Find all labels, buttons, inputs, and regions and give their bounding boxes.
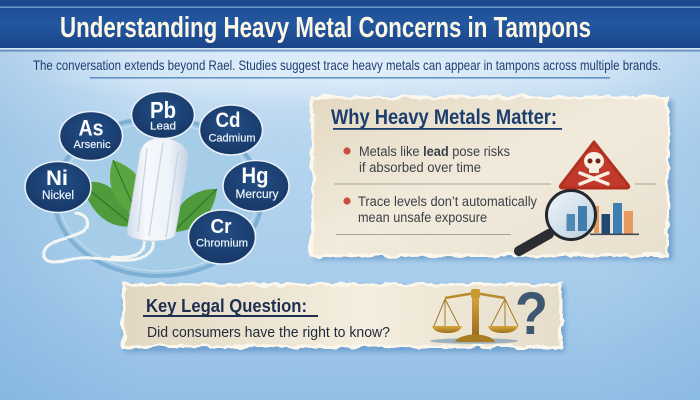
- paper card: [122, 283, 565, 352]
- icon: skull warning triangle: [560, 142, 629, 188]
- heading: Key Legal Question:: [146, 296, 307, 316]
- badge: chromium: Cr: [210, 216, 232, 238]
- bullet: lead risk: [343, 144, 510, 175]
- badge: arsenic: As: [78, 116, 104, 140]
- panel: key legal question: [122, 280, 565, 352]
- icon: scales of justice: [430, 289, 518, 344]
- icon: leaves: [82, 160, 217, 232]
- bullet: lead risk: if absorbed over time: [359, 160, 481, 175]
- badge: nickel: Nickel: [42, 190, 74, 202]
- badge: lead: [132, 92, 194, 138]
- bullet: trace levels: mean unsafe exposure: [358, 210, 487, 225]
- header banner: [0, 0, 700, 52]
- bullet: trace levels: [343, 194, 537, 225]
- bullet: lead risk: Metals like lead pose risks: [359, 144, 510, 159]
- circular backdrop ring: [54, 118, 262, 276]
- badge: cadmium: Cadmium: [208, 132, 256, 144]
- icon: question mark: ?: [515, 280, 548, 347]
- panel: tampon and metals illustration: [25, 92, 289, 276]
- badge: nickel: Ni: [46, 167, 68, 190]
- badge: lead: Pb: [150, 97, 176, 123]
- icon: tampon: [127, 138, 188, 241]
- panel: why heavy metals matter: [311, 96, 673, 260]
- icon: tampon string: [44, 213, 153, 262]
- badge: mercury: Hg: [242, 163, 268, 188]
- icon: bar chart with magnifying glass: [519, 190, 639, 251]
- badge: arsenic: Arsenic: [74, 139, 111, 151]
- badge: mercury: [223, 160, 289, 212]
- bullet: trace levels: Trace levels don’t automatically: [358, 194, 537, 209]
- badge: cadmium: Cd: [216, 109, 240, 132]
- question text: Did consumers have the right to know?: [147, 324, 390, 341]
- badge: arsenic: [60, 112, 122, 160]
- badge: cadmium: [200, 105, 262, 155]
- badge: lead: Lead: [150, 120, 176, 132]
- badge: chromium: Chromium: [196, 238, 248, 250]
- badge: mercury: Mercury: [236, 189, 279, 201]
- paper card: [311, 96, 673, 260]
- badge: chromium: [188, 210, 256, 264]
- heading: Why Heavy Metals Matter:: [331, 105, 557, 129]
- badge: nickel: [25, 162, 91, 212]
